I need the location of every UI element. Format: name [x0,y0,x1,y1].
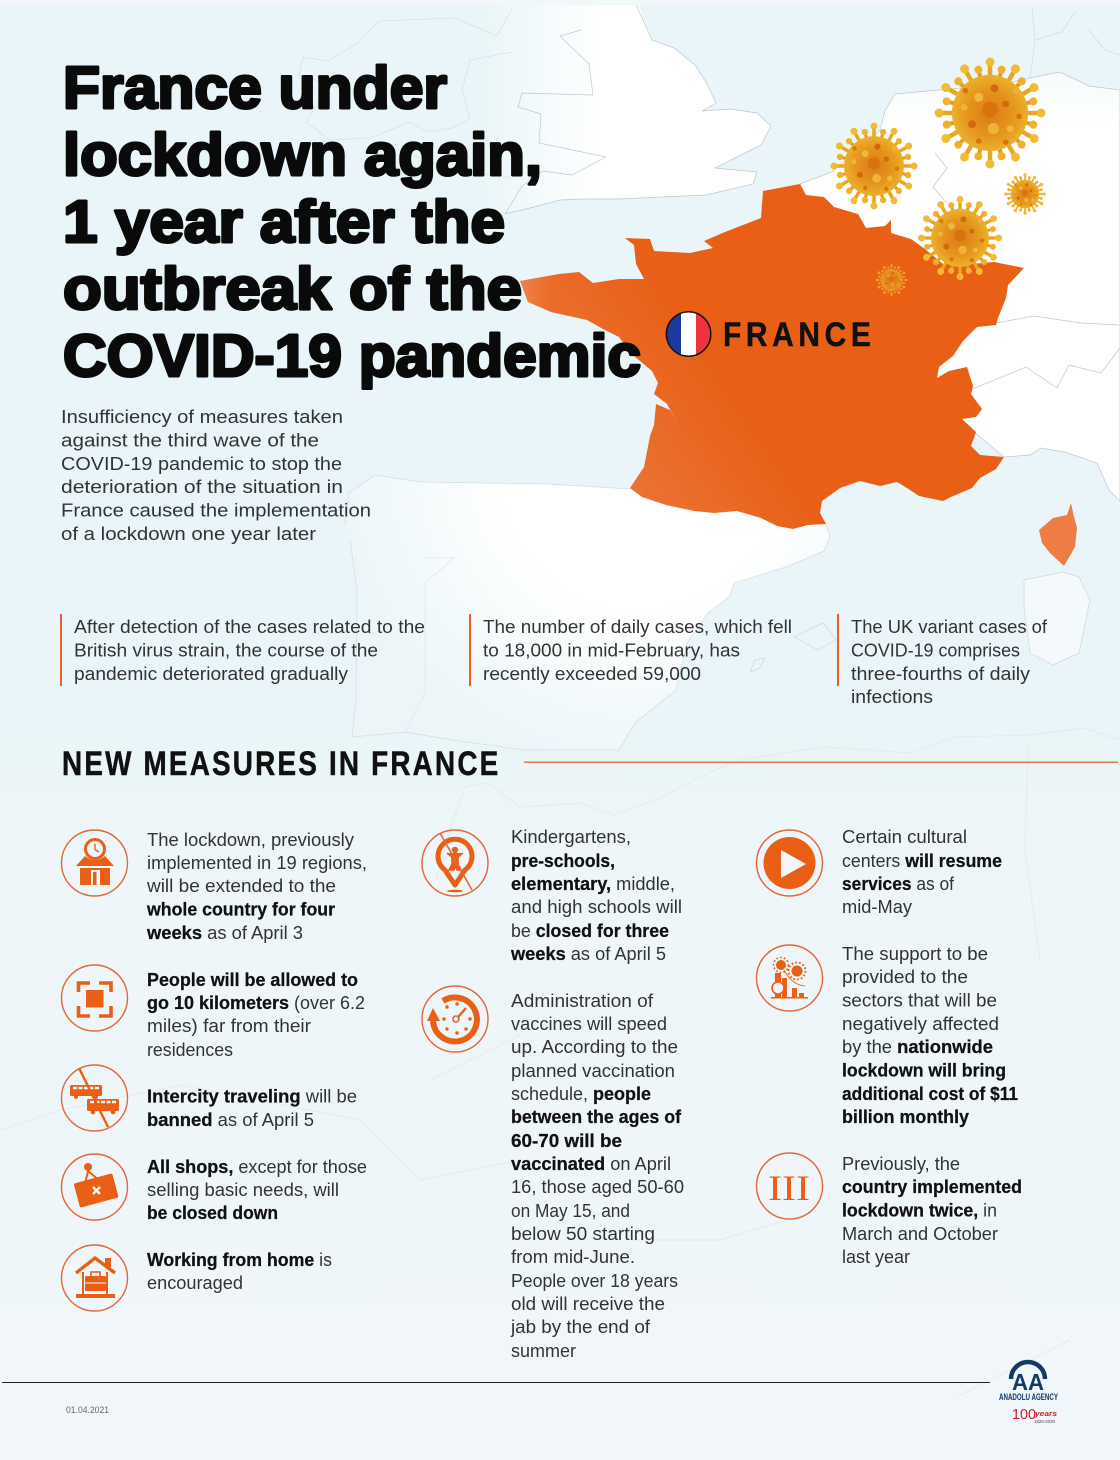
icon: French flag [666,312,711,356]
measure: vaccination speed-up: jab by the end of [510,1317,651,1337]
measure: economic support: negatively affected [842,1014,999,1034]
intro paragraph: Insufficiency of measures taken [61,407,343,427]
measure: cultural centers: centers will resume [842,851,1002,871]
icon: play button [756,830,822,896]
fact 3: three-fourths of daily [851,664,1030,684]
column 2 measures [422,827,684,1361]
measure: vaccination speed-up: 16, those aged 50-60 [511,1177,684,1197]
measure: lockdown extended: whole country for four [146,900,335,920]
column 1 measures [62,830,367,1311]
land: Iberia [345,475,830,750]
measure: lockdown extended: implemented in 19 regions, [147,853,367,873]
fact 3: The UK variant cases of [851,617,1048,637]
measure: vaccination speed-up: old will receive the [511,1294,665,1314]
measure: shops closed [62,1154,367,1223]
measure: previous lockdowns: country implemented [842,1177,1022,1197]
measure: vaccination speed-up: 60-70 will be [511,1131,622,1151]
France flag and label [666,312,871,356]
land: north-east Europe [800,72,1120,501]
measure: lockdown extended: weeks as of April 3 [146,923,303,943]
measure: vaccination speed-up: on May 15, and [511,1201,630,1221]
measure: working from home: encouraged [147,1273,243,1293]
country label: FRANCE [723,315,871,353]
measure: cultural centers: services as of [842,874,955,894]
icon: roman numeral three [756,1153,822,1219]
virus small [1004,173,1046,215]
fact 1: British virus strain, the course of the [74,640,378,660]
date: 01.04.2021 [66,1405,109,1416]
logo: Anadolu Agency: years [1034,1411,1057,1418]
measure: 10 kilometers: People will be allowed to [147,970,358,990]
measure: economic support: sectors that will be [842,990,997,1010]
fact 3 [837,614,1048,707]
measure: schools closed: elementary, middle, [511,874,675,894]
column 3 measures [756,827,1022,1267]
measure: schools closed: pre-schools, [511,851,615,871]
map: Corsica [1039,503,1077,566]
fact 1: pandemic deteriorated gradually [74,664,348,684]
icon: viruses and falling bars [756,945,822,1011]
measure: economic support: provided to the [842,967,968,987]
faint coast and border lines [299,7,1120,732]
measure: schools closed: weeks as of April 5 [510,944,666,964]
land: Great Britain [480,0,771,214]
intro paragraph: against the third wave of the [61,430,319,450]
icon: house with clock [62,830,128,896]
title: 1 year after the [63,188,505,255]
measure: vaccination speed-up: schedule, people [511,1084,651,1104]
measure: lockdown extended: will be extended to the [146,876,336,896]
virus medium [830,122,918,210]
icon: banned buses [62,1065,128,1131]
measure: cultural centers: mid-May [842,897,912,917]
measure: intercity travel: banned as of April 5 [147,1110,314,1130]
fact 1 [60,614,425,686]
measure: shops closed: selling basic needs, will [147,1180,339,1200]
measure: intercity travel: Intercity traveling will be [147,1086,357,1106]
intro paragraph: COVID-19 pandemic to stop the [61,454,342,474]
measure: previous lockdowns [756,1153,1022,1267]
logo: Anadolu Agency: 100 [1012,1406,1036,1423]
measure: 10 kilometers [62,965,365,1060]
icon: distance limit square [62,965,128,1031]
intro paragraph: of a lockdown one year later [61,524,316,544]
icon: roman numeral three: III [768,1168,810,1208]
measure: vaccination speed-up: up. According to the [511,1037,678,1057]
icon: house with briefcase [62,1245,128,1311]
measure: schools closed: and high schools will [511,897,682,917]
intro paragraph [61,407,371,544]
section heading: NEW MEASURES IN FRANCE [62,744,498,783]
measure: vaccination speed-up: below 50 starting [511,1224,655,1244]
footer rule [2,1382,990,1383]
measure: vaccination speed-up: vaccines will speed [511,1014,667,1034]
virus faint on France [876,264,907,296]
title: lockdown again, [63,121,542,188]
measure: economic support [756,944,1018,1127]
virus cluster [830,58,1046,296]
measure: lockdown extended: The lockdown, previously [147,830,354,850]
measure: previous lockdowns: Previously, the [842,1154,960,1174]
fact 2: to 18,000 in mid-February, has [483,640,740,660]
title: COVID-19 pandemic [63,322,641,389]
title [63,54,641,389]
measure: economic support: billion monthly [842,1107,969,1127]
measure: vaccination speed-up: Administration of [511,991,654,1011]
virus large [935,58,1045,168]
measure: economic support: lockdown will bring [842,1060,1006,1080]
measure: vaccination speed-up: People over 18 years [511,1271,678,1291]
coast lines: Iberia [345,475,830,750]
intro paragraph: France caused the implementation [61,500,371,520]
measure: 10 kilometers: go 10 kilometers (over 6.2 [147,993,365,1013]
intro paragraph: deterioration of the situation in [61,477,343,497]
measure: vaccination speed-up: planned vaccination [511,1061,675,1081]
map: mainland France [520,184,1024,529]
fact 1: After detection of the cases related to the [74,617,425,637]
measure: vaccination speed-up [422,986,684,1361]
measure: schools closed [422,827,682,964]
measure: intercity travel [62,1065,357,1131]
faint North Africa coast [0,728,1120,1395]
fact 3: COVID-19 comprises [851,640,1020,660]
measure: lockdown extended [62,830,367,943]
measure: economic support: additional cost of $11 [842,1084,1018,1104]
measure: schools closed: be closed for three [511,921,669,941]
measure: cultural centers: Certain cultural [842,827,967,847]
logo: Anadolu Agency: ANADOLU AGENCY [999,1392,1058,1402]
title: outbreak of the [63,255,522,322]
measure: cultural centers [756,827,1002,917]
measure: previous lockdowns: last year [842,1247,910,1267]
fact 2: The number of daily cases, which fell [483,617,792,637]
logo: Anadolu Agency [999,1362,1058,1424]
fact 2 [469,614,792,686]
measure: working from home: Working from home is [147,1250,332,1270]
measure: 10 kilometers: miles) far from their [147,1016,311,1036]
fact 2: recently exceeded 59,000 [483,664,701,684]
measure: previous lockdowns: March and October [842,1224,998,1244]
measure: previous lockdowns: lockdown twice, in [842,1200,997,1220]
measure: vaccination speed-up: from mid-June. [511,1247,635,1267]
icon: closed sign [62,1154,128,1220]
measure: economic support: by the nationwide [842,1037,993,1057]
measure: vaccination speed-up: vaccinated on April [511,1154,671,1174]
logo: Anadolu Agency: AA [1012,1369,1044,1395]
logo: Anadolu Agency: 1920-2020 [1034,1419,1055,1424]
icon: banned child location pin [422,830,488,896]
measure: vaccination speed-up: between the ages of [511,1107,682,1127]
measure: vaccination speed-up: summer [511,1341,576,1361]
title: France under [63,54,447,121]
measure: 10 kilometers: residences [147,1040,233,1060]
measure: schools closed: Kindergartens, [511,827,631,847]
fact 3: infections [851,687,933,707]
measure: shops closed: All shops, except for those [147,1157,367,1177]
measure: economic support: The support to be [842,944,988,964]
measure: working from home [62,1245,332,1311]
virus medium lower [918,196,1002,280]
icon: speedometer with arrow [422,986,488,1052]
coast lines: Great Britain [505,5,771,214]
land: Sardinia [1024,572,1090,665]
measure: shops closed: be closed down [147,1203,278,1223]
